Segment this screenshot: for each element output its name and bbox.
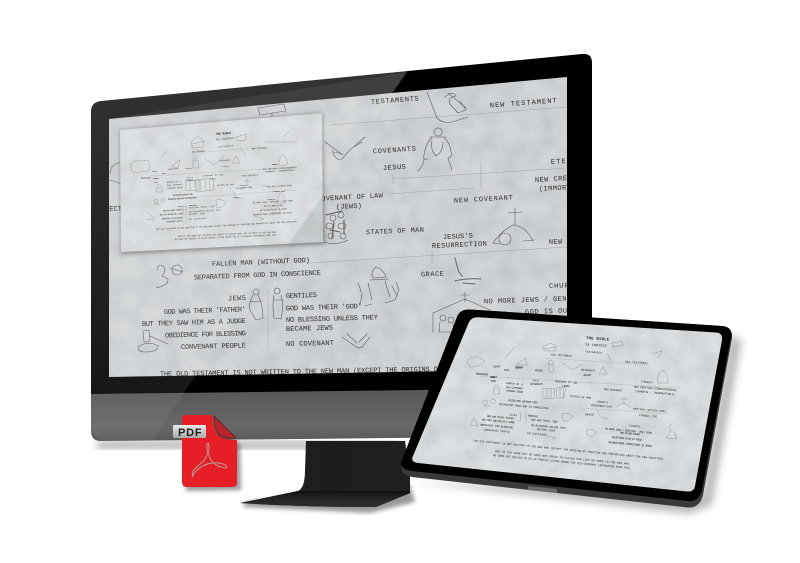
panel text: THE OLD TESTAMENT IS NOT WRITTEN TO THE NEW MAN (EXCEPT THE ORIGINS OF CREATION AND PROPHECIES ABOUT THE NEW CREATION) <box>156 220 297 231</box>
tablet text: UNCONDITIONAL INHERITANCE IN JESUS <box>608 441 652 448</box>
screen text: JEWS <box>228 295 246 303</box>
panel sketches <box>131 131 296 222</box>
screen text: ETERNITY <box>551 156 594 167</box>
tablet text: NO COVENANT <box>527 432 547 437</box>
panel text: NEW COVENANT <box>167 183 184 187</box>
screen text: NEW TESTAMENT <box>490 97 557 110</box>
screen text: (IMMORTAL / INCORRUPTIBLE) <box>539 179 659 194</box>
tablet text: CHURCH <box>629 425 641 429</box>
screen text: BUT THEY SAW HIM AS A JUDGE <box>142 318 246 329</box>
tablet text: BECAME JEWS <box>537 428 555 433</box>
tablet text: ADAM <box>493 366 500 368</box>
monitor soft shadow <box>97 441 400 449</box>
sketch: ark top <box>258 104 286 118</box>
screen text: COVENANTS <box>373 146 416 156</box>
tablet text: THE BIBLE <box>586 337 610 343</box>
panel text: GRACE <box>233 196 240 199</box>
screen text: CHURCH <box>549 282 579 291</box>
pdf label: PDF <box>178 427 202 439</box>
panel text: NO MORE JEWS / GENTILES - ONLY SONS <box>253 199 294 204</box>
panel text: ETERNAL LIFE <box>273 190 286 193</box>
screen text: GOD WAS THEIR 'GOD' <box>286 303 362 313</box>
sketch: robed Jew <box>249 289 263 320</box>
tablet text <box>473 337 677 470</box>
panel text: ADAM <box>152 170 158 173</box>
sketch: left arc <box>110 162 122 184</box>
screen text: NEW MAN (WITHIN GOD) <box>549 235 639 247</box>
tablet bezel <box>401 309 731 501</box>
panel text: JEWS <box>178 205 184 208</box>
tablet text: COVENANT <box>530 383 543 386</box>
panel text: STATES OF MAN <box>217 183 235 187</box>
tablet case <box>401 309 732 508</box>
panel text: NEW TESTAMENT <box>252 146 268 150</box>
panel text: ABRAHAM <box>168 167 179 171</box>
tablet text: IN CONTEXT <box>585 344 607 349</box>
tablet text: GOD IS THE SAME BUT HE DOES NOT SPEAK TO FALLEN MAN LIKE HE DOES TO THE NEW MAN. <box>495 450 631 466</box>
panel text: GOD WAS THEIR 'FATHER' <box>163 208 183 212</box>
panel text: JESUS <box>222 165 230 168</box>
tablet text: COVENANTS <box>581 369 595 373</box>
panel text: THROUGH JESUS <box>167 186 184 190</box>
tablet text: OBEDIENCE FOR BLESSING <box>480 424 513 429</box>
panel text: UNCONDITIONAL INHERITANCE IN JESUS <box>253 211 293 216</box>
panel text: NEW MAN (WITHIN GOD) <box>267 184 292 188</box>
tablet text: FALL <box>504 369 510 372</box>
panel text: CHURCH <box>267 198 276 201</box>
panel text: MAN <box>154 181 159 184</box>
panel sheet <box>120 113 323 252</box>
panel text: ETERNITY <box>272 163 279 166</box>
screen text: OBEDIENCE FOR BLESSING <box>165 330 246 340</box>
panel text: COVENANT <box>186 178 195 182</box>
panel text: OLD <box>187 176 194 179</box>
screen text: NO BLESSING UNLESS THEY <box>286 314 379 325</box>
tablet text: MAN <box>491 380 496 383</box>
tablet text: PERFECT <box>490 376 497 379</box>
screen text: BECAME JEWS <box>286 325 333 334</box>
panel text: BEGINNING <box>141 176 152 180</box>
monitor chin <box>91 385 592 441</box>
panel text: NEW CREATION (CONSCIOUSNESS) <box>263 166 297 171</box>
panel text: CONVENANT PEOPLE <box>166 219 184 223</box>
panel text: JESUS'S <box>239 184 248 187</box>
panel corner shade beyond glare <box>289 195 323 244</box>
overlay panel: PDF page preview <box>120 113 325 254</box>
sketch: cross and tomb <box>493 208 534 245</box>
screen text <box>110 96 567 376</box>
monitor bezel <box>91 54 592 394</box>
tablet text: GENTILES <box>528 415 539 418</box>
tablet screen <box>412 317 722 492</box>
screen text: THE OLD TESTAMENT IS NOT WRITTEN TO THE NEW MAN (EXCEPT THE ORIGINS OF CREATION AND PROPHECIES ABOUT THE NEW CREATION) <box>160 363 635 379</box>
tablet text: WE'RE MADE ALIVE IN JESUS <box>612 435 643 442</box>
tablet text: GRACE <box>585 414 594 416</box>
timeline lines <box>268 107 567 350</box>
tablet text: TESTAMENTS <box>585 351 602 355</box>
panel text: IN CONTEXT <box>216 137 234 141</box>
tablet text: (JEWS) <box>562 384 570 388</box>
panel text: SEPARATED FROM GOD IN CONSCIENCE <box>168 196 198 201</box>
tablet text: FALLEN MAN (WITHOUT GOD) <box>508 398 539 405</box>
screen background <box>109 77 567 377</box>
screen text: RESURRECTION <box>432 241 487 251</box>
panel text: PERFECT <box>153 177 160 180</box>
tablet text: MOSES <box>535 370 543 372</box>
tablet text: SEPARATED FROM GOD IN CONSCIENCE <box>499 403 549 410</box>
tablet text: NEW COVENANT <box>506 386 523 390</box>
panel text: FALLEN MAN (WITHOUT GOD) <box>173 193 193 197</box>
screen text: GRACE <box>421 271 444 279</box>
screen text: COVENANT OF LAW <box>317 192 384 204</box>
screen text: NEW COVENANT <box>454 194 513 206</box>
screen text: JESUS'S <box>443 233 473 242</box>
chin glare <box>91 394 183 441</box>
panel text: NEW COVENANT <box>242 173 259 177</box>
screen glare <box>109 72 408 377</box>
tablet shadow <box>412 335 742 514</box>
tablet text: STATES OF MAN <box>570 395 591 400</box>
tablet text: THE OLD TESTAMENT IS NOT WRITTEN TO THE NEW MAN (EXCEPT THE ORIGINS OF CREATION AND PROPHECIES ABOUT THE NEW CREATION) <box>473 439 664 461</box>
panel text: TESTAMENTS <box>218 144 234 148</box>
screen text: GOD WAS THEIR 'FATHER' <box>164 306 246 317</box>
panel text <box>141 132 297 241</box>
panel text: NO BLESSING UNLESS THEY <box>189 209 222 213</box>
tablet text: CONVENANT PEOPLE <box>484 429 510 434</box>
pdf shadow <box>186 420 241 491</box>
screen text: TESTAMENTS <box>371 95 419 107</box>
bezel glare <box>91 70 408 394</box>
sketch: scroll <box>427 92 468 122</box>
tablet text: BUT THEY SAW HIM AS A JUDGE <box>482 419 515 424</box>
tablet text: OLD TESTAMENT <box>551 354 572 358</box>
panel text: BECAME JEWS <box>189 212 206 216</box>
screen text: SEPARATED FROM GOD IN CONSCIENCE <box>194 270 321 282</box>
panel text: OBEDIENCE FOR BLESSING <box>162 216 184 220</box>
tablet text: COVENANT OF LAW <box>555 380 577 385</box>
panel text: WOMEN OF A <box>167 180 182 184</box>
panel text: RESURRECTION <box>236 186 253 190</box>
sketch: Jesus figure <box>418 128 452 171</box>
screen text: JESUS <box>383 164 406 173</box>
sketch: church <box>433 292 490 332</box>
tablet text: NEW CREATION (CONSCIOUSNESS) <box>634 385 677 392</box>
main screen <box>109 72 567 377</box>
tablet sketches <box>467 341 677 440</box>
panel text: GENTILES <box>189 204 198 207</box>
sketch: crowd <box>324 212 348 244</box>
tablet text: NEW MAN (WITHIN GOD) <box>633 407 667 413</box>
tablet text: (IMMORTAL / INCORRUPTIBLE) <box>635 389 675 396</box>
screen text: FALLEN MAN (WITHOUT GOD) <box>212 257 310 269</box>
panel text: WE'RE MADE ALIVE IN JESUS <box>260 207 288 212</box>
screen text: STATES OF MAN <box>366 227 424 237</box>
panel text: GOD WAS THEIR 'GOD' <box>189 205 216 209</box>
screen text: NO MORE JEWS / GENTILES - ONLY SONS <box>484 293 645 306</box>
icon: acrobat swirl <box>192 443 226 477</box>
tablet text: NEW TESTAMENT <box>625 361 648 365</box>
tablet text: NEW COVENANT <box>604 388 622 392</box>
screen text: NO COVENANT <box>286 340 334 349</box>
tablet text: OLD <box>533 380 539 382</box>
panel text: FALL <box>162 172 167 175</box>
screen text: PERFECT <box>92 206 122 214</box>
panel text: COVENANT OF LAW <box>203 173 224 177</box>
panel text: NO COVENANT <box>189 217 208 221</box>
tablet text: NO BLESSING UNLESS THEY <box>531 424 566 430</box>
monitor stand <box>240 441 415 513</box>
tablet text: HE DOES NOT RELATE TO US AS PEOPLE LIVING UNDER THE OLD COVENANT (SEPARATED FROM HIM) <box>493 453 631 470</box>
tablet text: BEGINNING <box>476 373 488 376</box>
panel text: GOD IS THE SAME BUT HE DOES NOT SPEAK TO FALLEN MAN LIKE HE DOES TO THE NEW MAN. <box>178 231 277 238</box>
tablet screen surface <box>412 317 722 492</box>
screen text: NEW CREATION (CONSCIOUSNESS) <box>535 170 665 185</box>
pdf folded corner <box>214 416 236 438</box>
tablet text: NO MORE JEWS / GENTILES - ONLY SONS <box>605 427 652 435</box>
sketch: handshake <box>325 137 365 160</box>
tablet text: ETERNAL LIFE <box>639 414 657 419</box>
tablet text: THROUGH JESUS <box>506 390 523 394</box>
icon: desktop monitor <box>91 54 592 516</box>
screen text: GENTILES <box>286 292 317 301</box>
panel text: HE DOES NOT RELATE TO US AS PEOPLE LIVING UNDER THE OLD COVENANT (SEPARATED FROM HIM) <box>175 234 277 241</box>
panel text: THE BIBLE <box>216 132 231 136</box>
sketch: gavel <box>138 330 168 352</box>
panel rules <box>150 147 296 222</box>
tablet text: RESURRECTION <box>591 404 612 409</box>
tablet rules <box>478 358 680 414</box>
screen text: CONVENANT PEOPLE <box>181 342 246 352</box>
tablet text: GOD WAS THEIR 'GOD' <box>531 418 559 424</box>
panel text: MOSES <box>185 167 193 170</box>
sketch: heads <box>156 265 183 288</box>
tablet text: JEWS <box>509 414 518 417</box>
panel text: OLD TESTAMENT <box>192 150 206 153</box>
tablet text: GOD IS OUR FATHER <box>620 432 640 436</box>
tablet text: JESUS'S <box>597 400 609 404</box>
pdf page <box>182 415 237 487</box>
panel text: (IMMORTAL / INCORRUPTIBLE) <box>265 169 295 173</box>
screen text: (JEWS) <box>336 203 362 212</box>
icon: PDF document <box>173 415 241 491</box>
sketch: robed Gentile <box>273 288 283 319</box>
tablet text: ABRAHAM <box>515 366 523 370</box>
hand-drawn sketches <box>110 92 534 352</box>
tablet text: GOD WAS THEIR 'FATHER' <box>487 414 515 420</box>
panel shadow <box>120 113 325 254</box>
panel text: BUT THEY SAW HIM AS A JUDGE <box>160 212 184 216</box>
icon: tablet <box>401 309 742 514</box>
panel text: GOD IS OUR FATHER <box>264 204 284 208</box>
sketch: gentile crowd <box>358 267 399 306</box>
panel text: COVENANTS <box>219 159 232 162</box>
sketch: second handshake <box>342 334 370 348</box>
tablet text: ETERNITY <box>641 381 653 384</box>
tablet home pill <box>528 486 557 493</box>
panel text: (JEWS) <box>210 178 216 180</box>
screen text: GOD IS OUR FATHER <box>525 306 606 317</box>
tablet text: JESUS <box>583 374 591 377</box>
sketch: grace feet <box>455 258 481 284</box>
tablet text: WOMEN OF A <box>506 382 523 386</box>
